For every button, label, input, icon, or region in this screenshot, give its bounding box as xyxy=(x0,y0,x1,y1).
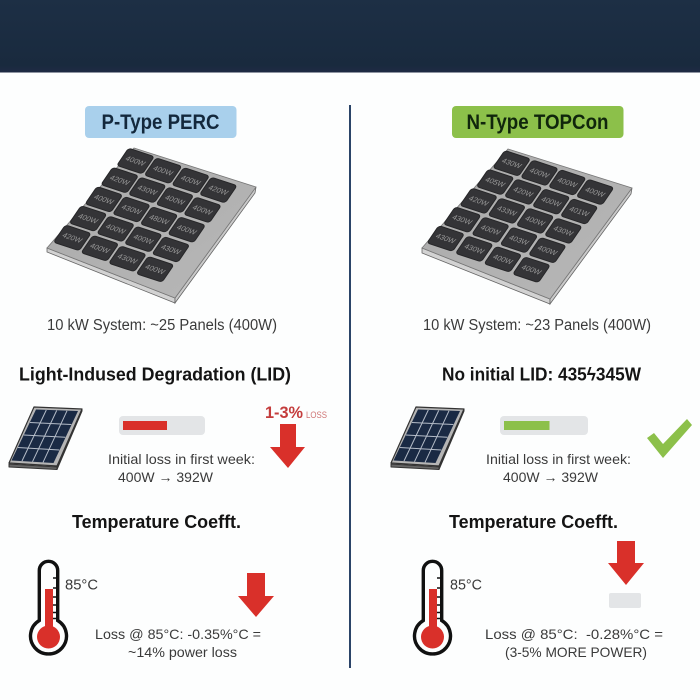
illustration: 23-panel array: 420W xyxy=(511,185,536,199)
illustration: 25-panel array: 420W xyxy=(108,173,132,187)
badge: N-Type TOPCon: N-Type TOPCon xyxy=(466,111,608,134)
progress bar: LID loss xyxy=(119,416,205,435)
badge: P-Type PERC: P-Type PERC xyxy=(102,111,220,134)
column divider xyxy=(349,105,351,668)
text: initial loss xyxy=(108,451,255,485)
illustration: 23-panel array: 400W xyxy=(528,166,552,180)
text: temperature loss: (3-5% MORE POWER) xyxy=(505,644,647,660)
heading: temperature coefficient: Temperature Coefft. xyxy=(449,512,618,532)
label: 1-3% loss: 1-3% xyxy=(265,403,303,422)
arrow: temperature loss xyxy=(238,573,274,617)
label: 1-3% loss xyxy=(265,403,327,422)
illustration: 25-panel array: 400W xyxy=(124,154,148,168)
illustration: 25-panel array xyxy=(47,148,256,303)
icon: solar panel xyxy=(9,407,82,470)
illustration: 23-panel array: 400W xyxy=(520,263,544,277)
illustration: 23-panel array: 430W xyxy=(434,232,458,246)
icon: check mark xyxy=(647,419,692,458)
illustration: 23-panel array: 420W xyxy=(467,194,491,208)
icon: thermometer xyxy=(414,561,450,654)
panel: N-Type TOPCon xyxy=(391,106,692,660)
illustration: 23-panel array: 405W xyxy=(483,175,508,189)
label: 85°C: 85°C xyxy=(65,576,98,594)
icon: solar panel xyxy=(391,407,464,470)
header band xyxy=(0,0,700,72)
illustration: 23-panel array: 400W xyxy=(536,244,560,257)
illustration: 23-panel array: 400W xyxy=(523,214,548,228)
arrow: LID loss xyxy=(270,424,305,468)
illustration: 25-panel array: 400W xyxy=(151,164,176,178)
illustration: 25-panel array: 400W xyxy=(104,222,128,236)
icon: thermometer xyxy=(30,561,66,654)
text: initial loss xyxy=(486,451,631,485)
illustration: 25-panel array: 430W xyxy=(120,203,144,217)
text: temperature loss: Loss @ 85°C: -0.35%°C = xyxy=(95,626,261,642)
text: initial loss: Initial loss in first week: xyxy=(108,451,255,467)
illustration: 25-panel array: 400W xyxy=(92,193,117,206)
illustration: 25-panel array: 400W xyxy=(175,223,199,237)
heading: LID: Light-Indused Degradation (LID) xyxy=(19,364,291,384)
label: 85°C: 85°C xyxy=(450,576,482,594)
illustration: 25-panel array: 400W xyxy=(88,242,113,255)
illustration: 25-panel array: 420W xyxy=(60,231,85,245)
illustration: 23-panel array: 401W xyxy=(567,205,592,219)
text: initial loss: 400W → 392W xyxy=(503,469,599,485)
text: initial loss: Initial loss in first week: xyxy=(486,451,631,467)
illustration: 25-panel array: 400W xyxy=(131,232,156,246)
text: temperature loss xyxy=(95,626,261,660)
illustration: 25-panel array: 430W xyxy=(116,252,140,266)
illustration: 25-panel array: 400W xyxy=(191,203,215,217)
illustration: 23-panel array: 430W xyxy=(500,157,524,170)
small gray bar xyxy=(609,593,641,608)
illustration: 23-panel array: 430W xyxy=(551,224,576,238)
illustration: 25-panel array: 420W xyxy=(206,183,231,197)
heading: temperature coefficient: Temperature Coefft. xyxy=(72,512,241,532)
caption: P-Type system size: 10 kW System: ~25 Panels (400W) xyxy=(47,317,277,334)
illustration: 25-panel array: 430W xyxy=(135,183,160,197)
illustration: 25-panel array: 430W xyxy=(159,243,184,257)
heading: no initial LID: No initial LID: 435ϟ345W xyxy=(442,364,641,384)
illustration: 23-panel array: 403W xyxy=(507,233,532,247)
illustration: 23-panel array: 433W xyxy=(495,204,520,218)
text: initial loss: 400W → 392W xyxy=(118,469,214,485)
illustration: 25-panel array: 400W xyxy=(163,193,188,207)
illustration: 23-panel array: 400W xyxy=(583,185,608,199)
illustration: 25-panel array: 400W xyxy=(179,174,203,187)
panel: P-Type PERC xyxy=(9,106,327,660)
text: temperature loss: ~14% power loss xyxy=(128,644,237,660)
illustration: 25-panel array: 400W xyxy=(76,212,101,226)
caption: N-Type system size: 10 kW System: ~23 Panels (400W) xyxy=(423,317,651,334)
badge: P-Type PERC xyxy=(85,106,236,138)
text: temperature loss xyxy=(485,626,663,660)
arrow: temperature loss xyxy=(608,541,644,585)
badge: N-Type TOPCon xyxy=(452,106,624,138)
illustration: 25-panel array: 400W xyxy=(143,263,168,276)
illustration: 23-panel array xyxy=(422,149,632,304)
label: 1-3% loss: LOSS xyxy=(306,410,327,420)
text: temperature loss: Loss @ 85°C: -0.28%°C = xyxy=(485,626,663,642)
illustration: 23-panel array: 400W xyxy=(491,253,516,266)
illustration: 23-panel array: 400W xyxy=(539,195,564,209)
illustration: 23-panel array: 430W xyxy=(450,213,475,227)
progress bar: no LID xyxy=(500,416,588,435)
illustration: 23-panel array: 400W xyxy=(479,223,503,237)
illustration: 25-panel array: 480W xyxy=(147,213,172,227)
illustration: 23-panel array: 430W xyxy=(462,242,487,256)
illustration: 23-panel array: 400W xyxy=(555,176,580,190)
